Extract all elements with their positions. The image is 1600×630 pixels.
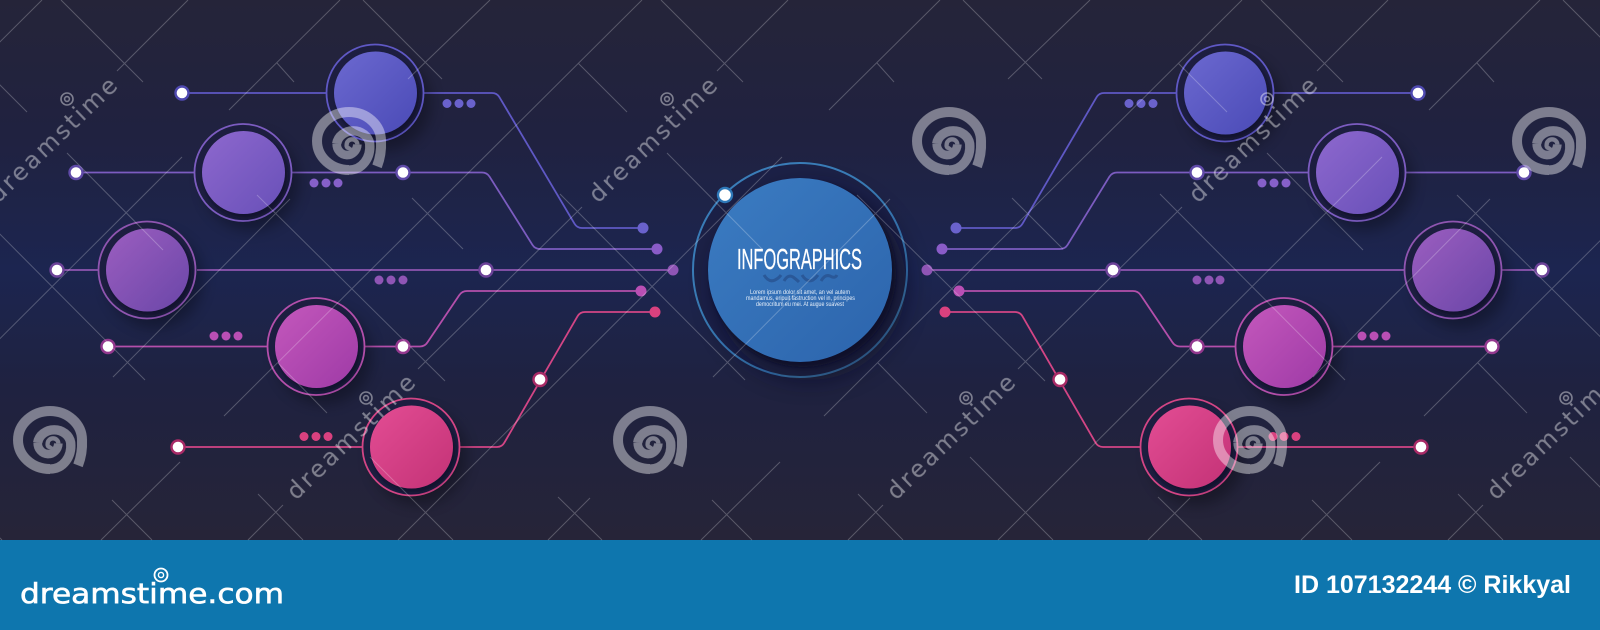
connector: left 1 xyxy=(182,93,643,228)
right disc 1 xyxy=(1176,44,1281,151)
right disc 5 xyxy=(1140,398,1245,505)
connector: left 5 xyxy=(178,312,655,447)
connector end dots xyxy=(636,222,964,318)
watermark text: dreamstime xyxy=(583,71,723,208)
hub disc xyxy=(708,178,892,362)
image id and credit: ID 107132244 © Rikkyal xyxy=(1294,571,1571,599)
connector: left 4 xyxy=(108,291,641,346)
left disc 2 xyxy=(194,124,299,230)
right disc 4 xyxy=(1236,298,1340,404)
right disc 2 xyxy=(1308,124,1413,230)
watermark text: dreamstime xyxy=(281,368,421,505)
watermark text xyxy=(0,71,1600,505)
connector: right 3 xyxy=(927,269,1542,271)
hub title: INFOGRAPHICS xyxy=(737,244,862,276)
watermark text: dreamstime xyxy=(1183,71,1323,208)
connector: right 2 xyxy=(942,172,1524,249)
hub body text: Lorem ipsum dolor sit amet, an vel autem xyxy=(750,290,850,296)
hub wave ornament xyxy=(764,275,837,282)
connector: right 4 xyxy=(959,291,1492,346)
central hub xyxy=(693,163,907,380)
white connector nodes xyxy=(50,86,1548,454)
left disc 1 xyxy=(326,44,431,151)
hub body text xyxy=(746,290,855,308)
left disc 3 xyxy=(98,222,203,328)
connector: left 2 xyxy=(76,172,657,249)
hub body text: mandamus, eripuit fastruction vel in, principes xyxy=(746,296,855,302)
watermark text: dreamstime xyxy=(881,368,1021,505)
brand logo: dreamstime.com xyxy=(20,577,284,610)
watermark spirals xyxy=(18,112,1581,469)
connector: right 5 xyxy=(945,312,1421,447)
three-dot markers xyxy=(210,99,1390,441)
hub body text: democritum eu mei. At augue suavest xyxy=(756,302,844,308)
left disc 5 xyxy=(362,398,467,505)
left disc 4 xyxy=(268,298,372,404)
connector: left 3 xyxy=(57,269,673,271)
connector: right 1 xyxy=(956,93,1418,228)
bottom brand bar xyxy=(0,540,1600,630)
right disc 3 xyxy=(1404,222,1509,328)
